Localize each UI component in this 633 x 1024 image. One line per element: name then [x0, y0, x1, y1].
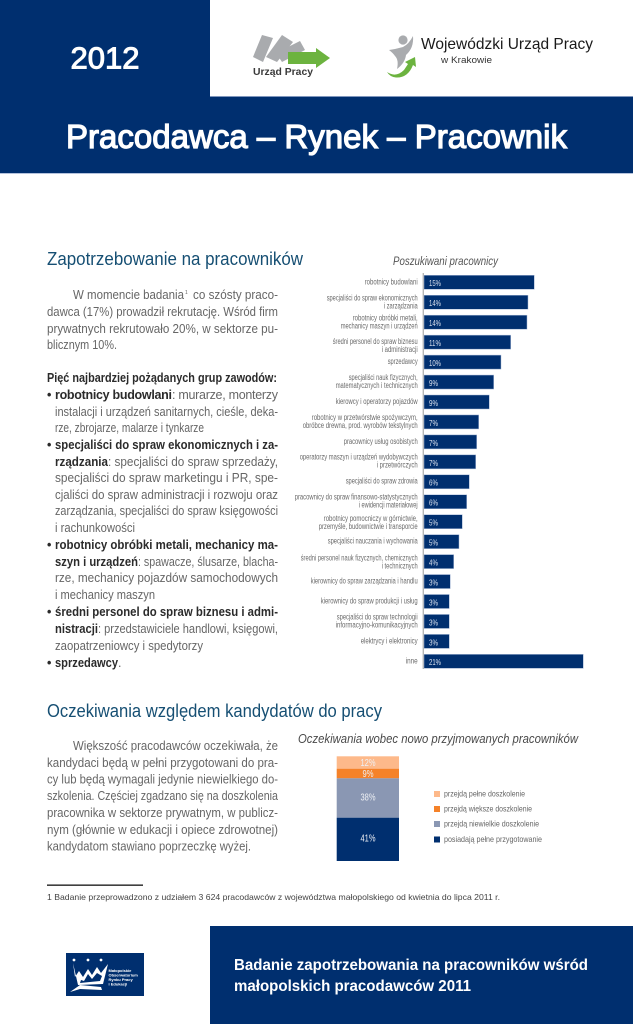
text block: five most wanted occupational groups: cjaliści do spraw administracji i rozwoju oraz	[55, 488, 278, 502]
text block: recruitment intro: dawca (17%) prowadził rekrutację. Wśród firm	[47, 305, 278, 319]
bar chart: wanted workers: 5%	[429, 518, 438, 528]
text block: five most wanted occupational groups: robotnicy budowlani	[55, 388, 172, 402]
bar chart: wanted workers: i przetwórczych	[377, 460, 418, 470]
text block: five most wanted occupational groups: specjaliści do spraw marketingu i PR, spe-	[55, 471, 278, 485]
bar chart: wanted workers: matematycznych i technicznych	[336, 381, 418, 390]
logo: Urząd Pracy	[253, 35, 330, 78]
text block: five most wanted occupational groups: sprzedawcy	[55, 656, 118, 670]
bar chart: wanted workers: specjaliści do spraw zdrowia	[346, 476, 418, 486]
text block: five most wanted occupational groups: : przedstawiciele handlowi, księgowi,	[98, 622, 278, 636]
logo: Wojewódzki Urząd Pracy	[387, 35, 593, 78]
title: Pracodawca – Rynek – Pracownik	[66, 118, 567, 155]
bar chart: wanted workers: operatorzy maszyn i urządzeń wydobywczych	[300, 452, 418, 462]
bar chart: wanted workers	[295, 273, 583, 669]
bar chart: wanted workers: specjaliści do spraw ekonomicznych	[327, 294, 418, 302]
logo: Wojewódzki Urząd Pracy: Wojewódzki Urząd Pracy	[421, 36, 593, 53]
bar chart: wanted workers: specjaliści do spraw technologii	[337, 612, 418, 622]
chart title: wanted workers: Poszukiwani pracownicy	[393, 254, 499, 268]
bar chart: wanted workers: 6%	[429, 478, 438, 488]
bar chart: wanted workers: 3%	[429, 638, 438, 648]
chart legend: posiadają pełne przygotowanie	[444, 834, 542, 844]
text block: five most wanted occupational groups: Pięć najbardziej pożądanych grup zawodów:	[47, 371, 277, 385]
bar chart: wanted workers: 14%	[429, 318, 441, 328]
bar chart: wanted workers: obróbce drewna, prod. wyrobów tekstylnych	[303, 421, 418, 430]
text block: five most wanted occupational groups: •	[47, 388, 51, 402]
text block: five most wanted occupational groups: zaopatrzeniowcy i spedytorzy	[55, 639, 204, 653]
bar chart: wanted workers: kierownicy do spraw produkcji i usług	[321, 596, 418, 606]
bar chart: wanted workers: elektrycy i elektronicy	[361, 636, 418, 646]
footer panel: Badanie zapotrzebowania na pracowników wśród	[234, 957, 588, 974]
text block: five most wanted occupational groups: nistracji	[55, 622, 98, 636]
bar chart: wanted workers: 10%	[429, 358, 441, 368]
bar chart: wanted workers: średni personel do spraw biznesu	[333, 337, 418, 346]
text block: expectations: kandydaci będą w pełni przygotowani do pra-	[47, 756, 278, 770]
bar chart: wanted workers: informacyjno-komunikacyjnych	[336, 620, 418, 630]
chart legend: przejdą pełne doszkolenie	[444, 788, 525, 798]
logo: Małopolskie Obserwatorium Rynku Pracy i Edukacji: i Edukacji	[108, 982, 127, 986]
logo: Małopolskie Obserwatorium Rynku Pracy i Edukacji: Małopolskie	[108, 968, 132, 973]
bar chart: wanted workers: 3%	[429, 598, 438, 608]
text block: recruitment intro: co szósty praco-	[193, 288, 278, 302]
bar chart: wanted workers: 15%	[429, 278, 441, 288]
bar chart: wanted workers: specjaliści nauk fizycznych,	[349, 373, 418, 382]
text block: expectations: kandydatom stawiano poprzeczkę wyżej.	[47, 840, 251, 854]
bar chart: wanted workers: 11%	[429, 338, 441, 348]
header band	[0, 0, 633, 174]
bar chart: wanted workers: kierownicy do spraw zarządzania i handlu	[311, 576, 418, 586]
text block: five most wanted occupational groups: : spawacze, ślusarze, blacha-	[138, 555, 278, 569]
bar chart: wanted workers: 3%	[429, 618, 438, 628]
bar chart: wanted workers: 4%	[429, 558, 438, 568]
text block: expectations: szkolenia. Częściej zgadzano się na doszkolenia	[47, 789, 278, 803]
text block: five most wanted occupational groups: i rachunkowości	[55, 521, 135, 535]
text block: five most wanted occupational groups: instalacji i urządzeń sanitarnych, cieśle, deka-	[55, 405, 278, 419]
bar chart: wanted workers: i technicznych	[382, 562, 418, 570]
bar chart: wanted workers: sprzedawcy	[388, 357, 418, 366]
logo: Urząd Pracy: Urząd Pracy	[253, 66, 313, 78]
text block: five most wanted occupational groups	[47, 371, 279, 670]
text block: five most wanted occupational groups: : murarze, monterzy	[172, 388, 279, 402]
stacked bar chart	[337, 756, 399, 861]
logo: Małopolskie Obserwatorium Rynku Pracy i Edukacji: Obserwatorium	[108, 972, 138, 978]
chart legend: przejdą niewielkie doszkolenie	[444, 818, 539, 828]
text block: five most wanted occupational groups: •	[47, 538, 51, 552]
bar chart: wanted workers: specjaliści nauczania i wychowania	[328, 536, 418, 546]
text block: five most wanted occupational groups: •	[47, 605, 51, 619]
bar chart: wanted workers: 7%	[429, 438, 438, 448]
logo: Małopolskie Obserwatorium Rynku Pracy i Edukacji: Rynku Pracy	[108, 977, 134, 982]
text block: expectations: Większość pracodawców oczekiwała, że	[73, 739, 278, 753]
bar chart: wanted workers: 6%	[429, 498, 438, 508]
heading: expectations of candidates: Oczekiwania względem kandydatów do pracy	[47, 701, 382, 721]
text block: recruitment intro	[47, 288, 278, 352]
text block: five most wanted occupational groups: robotnicy obróbki metali, mechanicy ma-	[55, 538, 278, 552]
bar chart: wanted workers: 21%	[429, 657, 441, 667]
stacked bar chart: 41%	[360, 834, 376, 844]
bar chart: wanted workers: pracownicy do spraw finansowo-statystycznych	[295, 492, 418, 502]
bar chart: wanted workers: i administracji	[382, 345, 418, 354]
heading: demand for workers: Zapotrzebowanie na pracowników	[47, 249, 304, 269]
bar chart: wanted workers: robotnicy w przetwórstwie spożywczym,	[312, 413, 418, 422]
bar chart: wanted workers: 7%	[429, 458, 438, 468]
text block: five most wanted occupational groups: i mechanicy maszyn	[55, 588, 155, 602]
stacked bar chart: 9%	[362, 769, 374, 780]
bar chart: wanted workers: robotnicy obróbki metali,	[353, 314, 418, 322]
bar chart: wanted workers: i ewidencji materiałowej	[359, 500, 418, 510]
text block: expectations: cy lub będą wymagali jedynie niewielkiego do-	[47, 772, 278, 786]
text block: expectations	[47, 739, 278, 854]
bar chart: wanted workers: inne	[406, 656, 418, 666]
bar chart: wanted workers: robotnicy pomocniczy w górnictwie,	[324, 514, 418, 523]
footnote: 1 Badanie przeprowadzono z udziałem 3 624 pracodawców z województwa małopolskiego od kwietnia do lipca 2011 r.	[47, 892, 500, 902]
text block: recruitment intro: W momencie badania	[73, 288, 184, 302]
chart legend: przejdą większe doszkolenie	[444, 804, 532, 814]
text block: recruitment intro: blicznym 10%.	[47, 338, 117, 352]
stacked bar chart: 38%	[360, 792, 376, 804]
text block: expectations: pracownika w sektorze prywatnym, w publicz-	[47, 806, 278, 820]
bar chart: wanted workers: pracownicy usług osobistych	[344, 437, 418, 446]
text block: five most wanted occupational groups: rze, zbrojarze, malarze i tynkarze	[55, 421, 204, 435]
footer panel	[210, 926, 633, 1024]
text block: recruitment intro: 1	[185, 290, 188, 296]
text block: five most wanted occupational groups: rządzania	[55, 455, 109, 469]
bar chart: wanted workers: średni personel nauk fizycznych, chemicznych	[301, 554, 418, 562]
chart legend	[434, 788, 542, 844]
logo: Wojewódzki Urząd Pracy: w Krakowie	[440, 55, 492, 65]
text block: five most wanted occupational groups: specjaliści do spraw ekonomicznych i za-	[55, 438, 278, 452]
chart title: expectations: Oczekiwania wobec nowo przyjmowanych pracowników	[298, 731, 579, 746]
bar chart: wanted workers: 9%	[429, 398, 438, 408]
year: 2012	[70, 40, 140, 76]
bar chart: wanted workers: kierowcy i operatorzy pojazdów	[336, 397, 418, 406]
bar chart: wanted workers: 7%	[429, 418, 438, 428]
bar chart: wanted workers: przemyśle, budownictwie i transporcie	[319, 522, 418, 531]
text block: five most wanted occupational groups: zarządzania, specjaliści do spraw księgowości	[55, 504, 278, 518]
text block: five most wanted occupational groups: •	[47, 438, 51, 452]
text block: five most wanted occupational groups: .	[118, 656, 121, 670]
footer panel: małopolskich pracodawców 2011	[234, 978, 471, 995]
bar chart: wanted workers: robotnicy budowlani	[365, 278, 418, 286]
text block: five most wanted occupational groups: rze, mechanicy pojazdów samochodowych	[55, 571, 278, 585]
stacked bar chart: 12%	[360, 758, 376, 769]
bar chart: wanted workers: 3%	[429, 578, 438, 588]
text block: five most wanted occupational groups: : specjaliści do spraw sprzedaży,	[108, 455, 278, 469]
bar chart: wanted workers: 5%	[429, 538, 438, 548]
logo: Małopolskie Obserwatorium Rynku Pracy i Edukacji	[66, 953, 144, 996]
bar chart: wanted workers: 9%	[429, 378, 438, 388]
text block: five most wanted occupational groups: średni personel do spraw biznesu i admi-	[55, 605, 278, 619]
bar chart: wanted workers: 14%	[429, 298, 441, 308]
bar chart: wanted workers: i zarządzania	[384, 302, 418, 310]
text block: recruitment intro: prywatnych rekrutowało 20%, w sektorze pu-	[47, 322, 278, 336]
bar chart: wanted workers: mechanicy maszyn i urządzeń	[341, 322, 418, 330]
text block: five most wanted occupational groups: •	[47, 656, 51, 670]
text block: five most wanted occupational groups: szyn i urządzeń	[55, 555, 138, 569]
text block: expectations: nym (głównie w edukacji i opiece zdrowotnej)	[47, 823, 278, 837]
